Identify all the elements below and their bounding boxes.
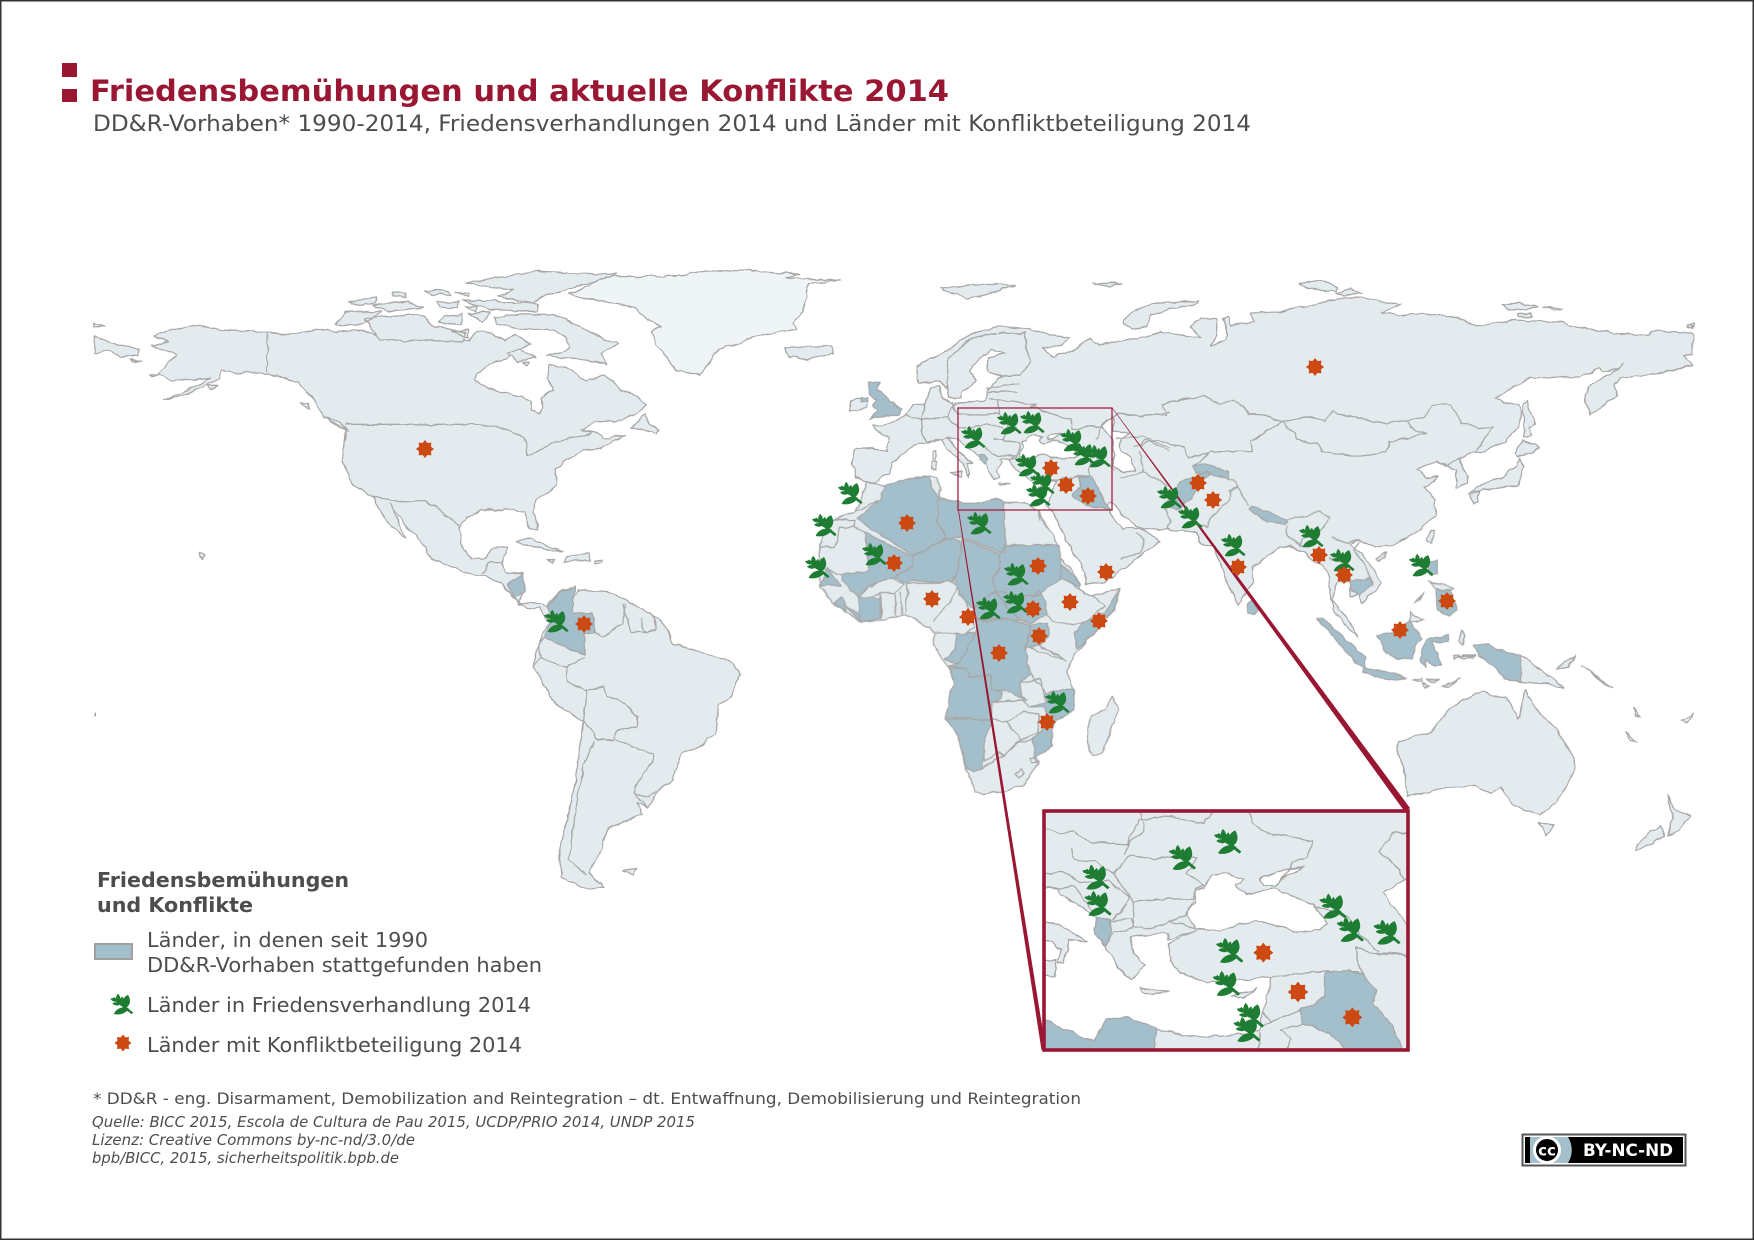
map: Eurasia mainland — [853, 297, 1693, 636]
license badge: BY-NC-ND — [1583, 1141, 1673, 1161]
title marker squares — [62, 63, 77, 102]
map: Africa — [818, 476, 1120, 795]
legend heading: Friedensbemühungen — [97, 868, 349, 892]
map: Europe and Middle East detail — [850, 333, 1170, 509]
license badge: cc — [1538, 1142, 1556, 1160]
sources: Quelle: BICC 2015, Escola de Cultura de Pau 2015, UCDP/PRIO 2014, UNDP 2015 — [92, 1113, 695, 1131]
legend swatch: DD&R — [95, 944, 132, 959]
Iceland — [786, 346, 833, 359]
legend text: DD&R: Länder, in denen seit 1990 — [147, 928, 428, 952]
map: Americas — [94, 270, 839, 889]
South America — [533, 587, 740, 889]
peace negotiation markers — [545, 412, 1433, 713]
map: East Asia islands and borders — [1123, 280, 1693, 503]
title block — [62, 63, 1251, 137]
title: Friedensbemühungen und aktuelle Konflikte 2014 — [90, 74, 949, 108]
Greenland — [570, 270, 839, 375]
legend — [95, 868, 542, 1057]
inset conflict markers — [1253, 943, 1362, 1027]
conflict markers — [416, 358, 1456, 731]
map: New Zealand — [1635, 795, 1690, 850]
sources: Lizenz: Creative Commons by-nc-nd/3.0/de — [92, 1131, 415, 1149]
sources: bpb/BICC, 2015, sicherheitspolitik.bpb.de — [92, 1149, 399, 1167]
inset map: Eastern Mediterranean and Black Sea — [1046, 812, 1406, 1048]
legend icon: conflict star — [114, 1034, 132, 1052]
footnote: * DD&R - eng. Disarmament, Demobilization and Reintegration – dt. Entwaffnung, Demobilisierung und Reintegration — [93, 1089, 1081, 1108]
inset frame — [1044, 811, 1408, 1050]
legend text: DD&R: DD&R-Vorhaben stattgefunden haben — [147, 953, 542, 977]
map: Svalbard — [940, 283, 1122, 299]
inset connector left — [958, 510, 1046, 1050]
inset peace markers — [1083, 830, 1400, 1041]
inset locator box — [958, 408, 1112, 510]
legend text: peace negotiations: Länder in Friedensverhandlung 2014 — [147, 993, 531, 1017]
map: Oceania — [1398, 324, 1693, 835]
map: South and Southeast Asia — [1120, 450, 1475, 687]
subtitle: DD&R-Vorhaben* 1990-2014, Friedensverhandlungen 2014 und Länder mit Konfliktbeteiligung 2014 — [93, 112, 1251, 137]
legend icon: peace branch — [111, 994, 133, 1014]
legend heading: und Konflikte — [97, 893, 253, 917]
borders Americas — [267, 332, 657, 875]
inset connector right — [1112, 408, 1410, 812]
license badge — [1522, 1134, 1686, 1166]
DD&R: Colombia, Nicaragua — [508, 574, 595, 654]
world map — [94, 270, 1693, 889]
legend text: conflict: Länder mit Konfliktbeteiligung 2014 — [147, 1033, 522, 1057]
